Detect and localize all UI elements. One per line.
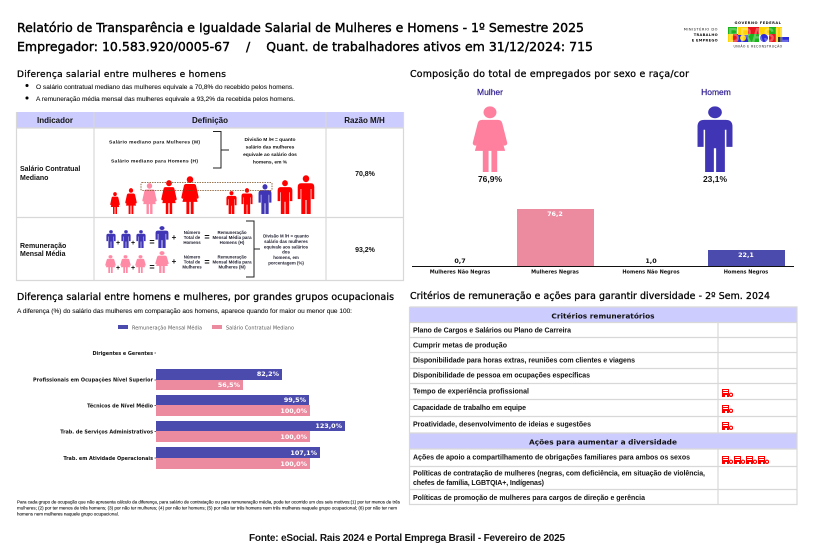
icons: marcadores de critérios <box>722 389 769 464</box>
bar chart: sexo e raça: 0,7 <box>454 257 466 265</box>
icons: mulheres: = <box>204 257 210 267</box>
bar chart: grupos ocupacionais: 123,0% <box>315 422 343 430</box>
bar chart: sexo e raça <box>412 209 794 276</box>
row: salário contratual mediano: homens, em % <box>253 160 288 166</box>
row: salário contratual mediano: Salário Contratual <box>20 166 80 173</box>
icons: pessoas ordenadas por salário <box>110 175 314 214</box>
bar chart: sexo e raça: 76,2 <box>547 210 563 218</box>
icons: homens: = <box>149 237 155 247</box>
bar chart: grupos ocupacionais: 100,0% <box>280 433 308 441</box>
fórmula: textos: Total de <box>184 235 201 240</box>
fórmula: textos: Remuneração <box>217 230 247 235</box>
nota de rodapé <box>17 500 401 518</box>
logo: ministério: MINISTÉRIO DO <box>684 26 718 32</box>
bar chart: sexo e raça: Mulheres Negras <box>531 270 579 276</box>
panel: tabela critérios: Políticas de promoção de mulheres para cargos de direção e gerência <box>413 495 645 502</box>
bar chart: grupos ocupacionais <box>33 351 345 469</box>
panel: tabela critérios: Tempo de experiência profissional <box>413 388 529 396</box>
fórmula: textos: Divisão M /H = quanto <box>263 234 309 238</box>
logo: governo federal brasil: GOVERNO FEDERAL <box>735 21 782 25</box>
logo: governo federal brasil: UNIÃO E RECONSTRUÇÃO <box>733 44 783 48</box>
logo: ministério <box>684 26 718 42</box>
fonte: Fonte: eSocial. Rais 2024 e Portal Emprega Brasil - Fevereiro de 2025 <box>249 533 565 544</box>
fórmula: textos: homens, em <box>273 255 299 260</box>
pictograma: mulher: 76,9% <box>478 174 502 184</box>
legenda: Remuneração Mensal Média <box>132 324 202 332</box>
bar chart: grupos ocupacionais: 107,1% <box>290 449 318 457</box>
bar chart: grupos ocupacionais: Profissionais em Ocupações Nível Superior <box>33 376 154 384</box>
bar chart: grupos ocupacionais: Técnicos de Nível Médio <box>87 402 154 410</box>
row: salário contratual mediano: equivale ao salário dos <box>243 152 297 158</box>
icons: mulheres: + <box>172 257 177 266</box>
bullets: A remuneração média mensal das mulheres equivale a 93,2% da recebida pelos homens. <box>36 96 295 103</box>
bar chart: sexo e raça: Homens Não Negros <box>622 270 680 276</box>
bar chart: grupos ocupacionais: Trab. de Serviços Administrativos <box>60 430 153 436</box>
heading: composição: Composição do total de empregados por sexo e raça/cor <box>410 69 689 80</box>
bar chart: grupos ocupacionais: Trab. em Atividade Operacionais <box>63 456 153 462</box>
fórmula: textos: dos <box>282 250 290 254</box>
row: remuneração mensal média: 93,2% <box>355 247 376 254</box>
fórmula: textos: Total de <box>184 260 201 264</box>
fórmula: textos: Mulheres <box>182 264 202 270</box>
panel: tabela critérios: Ações para aumentar a diversidade <box>529 438 677 446</box>
bar chart: grupos ocupacionais: 100,0% <box>280 407 308 415</box>
title <box>17 20 593 54</box>
bar chart: grupos ocupacionais: Dirigentes e Gerentes <box>92 351 153 357</box>
fórmula: textos: Homens <box>183 240 201 245</box>
panel: tabela critérios: Plano de Cargos e Salários ou Plano de Carreira <box>413 328 571 334</box>
pictograma: homem: Homem <box>701 87 731 97</box>
icons: homens: + <box>172 233 177 242</box>
panel: tabela critérios: Critérios remuneratórios <box>551 312 655 320</box>
row: salário contratual mediano: Mediano <box>20 175 48 182</box>
fórmula: textos: Mensal Média para <box>212 235 252 240</box>
panel: tabela indicadores <box>16 112 404 280</box>
icons: mulheres: + <box>131 265 135 272</box>
legenda: Salário Contratual Mediano <box>226 324 294 332</box>
nota de rodapé: mulheres; (2) por ter menos de três homens; (3) por não ter mulheres; (4) por não ter homens; (5) por não ter três homens nem três mulheres naquele grupo ocupacional; (6) por não ter nem <box>17 506 397 512</box>
logo: governo federal brasil <box>728 21 789 48</box>
fórmula: textos: Mulheres (M) <box>218 264 246 270</box>
fórmula: textos: porcentagem (%) <box>268 260 304 266</box>
bar chart: sexo e raça: 1,0 <box>645 257 657 265</box>
row: remuneração mensal média: Remuneração <box>20 243 66 250</box>
logo: governo federal brasil: BRASIL <box>728 25 789 47</box>
pictograma: homem <box>698 87 732 184</box>
panel: tabela critérios: Disponibilidade para horas extras, reuniões com clientes e viagens <box>413 358 635 364</box>
icons: mulheres: + <box>116 265 120 272</box>
bar chart: grupos ocupacionais: 56,5% <box>218 381 241 389</box>
icons: homens: + <box>116 240 120 247</box>
icons: mulheres <box>105 251 210 273</box>
panel: tabela indicadores: Indicador <box>37 116 73 125</box>
icons: homens <box>106 226 210 248</box>
panel: tabela indicadores: Razão M/H <box>344 116 385 125</box>
fórmula: textos: Homens (H) <box>220 240 245 245</box>
bar chart: sexo e raça: Mulheres Não Negras <box>430 270 490 276</box>
bar chart: sexo e raça: Homens Negros <box>724 270 768 276</box>
row: salário contratual mediano: salário das mulheres <box>246 144 295 150</box>
subtítulo: A diferença (%) do salário das mulheres em comparação aos homens, aparece quando for maior ou menor que 100: <box>17 308 352 315</box>
fórmula: textos: Número <box>184 230 201 235</box>
panel: tabela indicadores: Definição <box>192 116 228 125</box>
pictograma: homem: 23,1% <box>703 174 727 184</box>
panel: tabela critérios <box>410 307 797 504</box>
row: salário contratual mediano: Salário mediano para Mulheres (M) <box>109 140 200 146</box>
row: salário contratual mediano <box>20 132 376 182</box>
nota de rodapé: homens nem mulheres naquele grupo ocupacional. <box>17 512 119 518</box>
fórmula: textos <box>182 221 309 277</box>
fórmula: textos: Remuneração <box>217 254 247 260</box>
logo: ministério: E EMPREGO <box>692 38 718 42</box>
row: salário contratual mediano: Salário mediano para Homens (H) <box>111 158 198 164</box>
bar chart: sexo e raça: 22,1 <box>738 251 754 259</box>
row: salário contratual mediano: 70,8% <box>355 171 376 178</box>
pictograma: mulher <box>473 87 507 184</box>
heading: critérios: Critérios de remuneração e ações para garantir diversidade - 2º Sem. 2024 <box>410 291 770 302</box>
panel: tabela critérios: Cumprir metas de produção <box>413 342 507 350</box>
logo: ministério: TRABALHO <box>694 33 718 37</box>
pictograma: mulher: Mulher <box>477 87 503 97</box>
title: Relatório de Transparência e Igualdade Salarial de Mulheres e Homens - 1º Semestre 2025 <box>17 20 584 35</box>
bullets: O salário contratual mediano das mulheres equivale a 70,8% do recebido pelos homens. <box>36 84 294 91</box>
icons: homens: + <box>131 240 135 247</box>
legenda <box>118 324 294 332</box>
fórmula: textos: salário das mulheres <box>264 239 308 244</box>
row: remuneração mensal média <box>20 243 376 258</box>
title: Empregador: 10.583.920/0005-67 / Quant. de trabalhadores ativos em 31/12/2024: 715 <box>17 39 593 54</box>
fórmula: textos: equivale aos salários <box>264 244 309 250</box>
heading: diferença salarial: Diferença salarial entre mulheres e homens <box>17 70 226 80</box>
panel: tabela critérios: chefes de família, LGBTQIA+, Indígenas) <box>413 480 544 487</box>
fórmula: textos: Mensal Média para <box>212 260 252 264</box>
panel: tabela critérios: Ações de apoio a compartilhamento de obrigações familiares para ambos os sexos <box>413 454 690 462</box>
panel: tabela critérios: Disponibilidade de pessoa em ocupações específicas <box>413 372 590 380</box>
panel: tabela critérios: Capacidade de trabalho em equipe <box>413 405 526 412</box>
bar chart: grupos ocupacionais: 99,5% <box>284 396 307 404</box>
fórmula: textos: Número <box>184 254 201 260</box>
icons: mulheres: = <box>149 262 155 272</box>
row: salário contratual mediano: Divisão M /H = quanto <box>245 137 295 143</box>
row: remuneração mensal média: Mensal Média <box>20 251 66 258</box>
panel: tabela critérios: Proatividade, desenvolvimento de ideias e sugestões <box>413 422 591 428</box>
bullets <box>26 84 295 103</box>
bar chart: grupos ocupacionais: 82,2% <box>257 370 280 378</box>
heading: diferença por grupos ocupacionais: Diferença salarial entre homens e mulheres, por grandes grupos ocupacionais <box>17 292 394 303</box>
icons: homens: = <box>204 232 210 242</box>
panel: tabela critérios: Políticas de contratação de mulheres (negras, com deficiência, em situação de violência, <box>413 470 705 478</box>
nota de rodapé: Para cada grupo de ocupação que não apresenta cálculo da diferença, para salário de contratação ou para remuneração média, pode ter ocorrido um dos seis motivos:(1) por ter menos de três <box>17 500 401 506</box>
bar chart: grupos ocupacionais: 100,0% <box>280 460 308 468</box>
